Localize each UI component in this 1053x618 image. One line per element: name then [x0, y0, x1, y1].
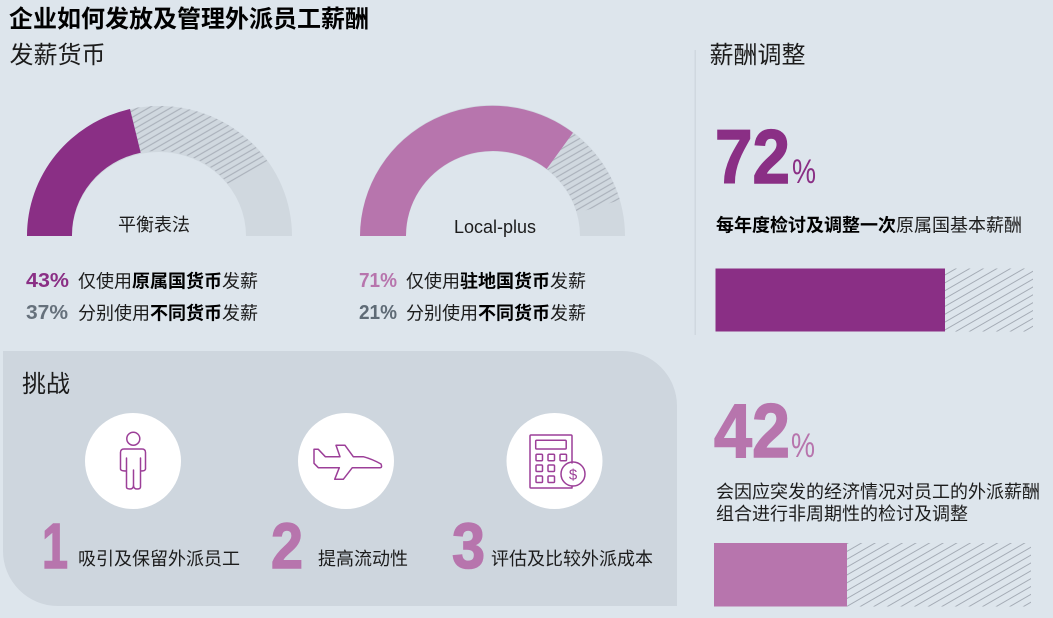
panel: challenges — [3, 351, 677, 606]
icon: calculator — [506, 413, 602, 509]
item 3: 评估及比较外派成本 — [491, 545, 653, 571]
text: ad hoc review — [716, 478, 1040, 526]
stat: 72%: 72 — [715, 115, 790, 200]
item 3: 3 — [452, 510, 485, 582]
legend: local-plus — [359, 268, 586, 326]
item 1: 1 — [42, 510, 68, 582]
heading: challenges: 挑战 — [22, 364, 70, 399]
title: 企业如何发放及管理外派员工薪酬 — [9, 0, 369, 34]
stat: 42%: 42 — [714, 389, 790, 474]
text: ad hoc review: 会因应突发的经济情况对员工的外派薪酬 — [716, 478, 1040, 504]
legend: local-plus: 仅使用驻地国货币发薪 — [406, 268, 586, 294]
legend: balance sheet: 43% — [26, 270, 69, 292]
gauge: local-plus — [360, 105, 625, 237]
gauge: balance sheet — [27, 106, 292, 237]
gauge: local-plus: Local-plus — [454, 217, 536, 237]
legend: local-plus: 21% — [359, 302, 397, 324]
item 2: 2 — [271, 510, 303, 582]
item 2 — [271, 510, 408, 582]
gauge: balance sheet: 平衡表法 — [118, 211, 190, 237]
legend: balance sheet: 仅使用原属国货币发薪 — [78, 268, 258, 294]
icon: calculator: $ — [569, 466, 578, 484]
item 1: 吸引及保留外派员工 — [78, 545, 240, 571]
stat: 42%: % — [791, 427, 815, 465]
item 1 — [42, 510, 240, 582]
legend: balance sheet — [26, 268, 258, 326]
heading: payment currency: 发薪货币 — [10, 35, 106, 70]
text: ad hoc review: 组合进行非周期性的检讨及调整 — [716, 500, 968, 526]
bar: 72% — [716, 268, 1033, 332]
icon: person — [85, 413, 181, 509]
item 2: 提高流动性 — [318, 545, 408, 571]
legend: local-plus: 71% — [359, 270, 397, 292]
legend: balance sheet: 37% — [26, 302, 68, 324]
icon: plane — [298, 413, 394, 509]
legend: local-plus: 分别使用不同货币发薪 — [406, 300, 586, 326]
item 3 — [452, 510, 653, 582]
legend: balance sheet: 分别使用不同货币发薪 — [78, 300, 258, 326]
heading: salary adjustment: 薪酬调整 — [710, 35, 806, 70]
stat: 72%: % — [792, 153, 816, 191]
text: annual review: 每年度检讨及调整一次原属国基本薪酬 — [716, 212, 1022, 238]
bar: 42% — [714, 543, 1031, 606]
